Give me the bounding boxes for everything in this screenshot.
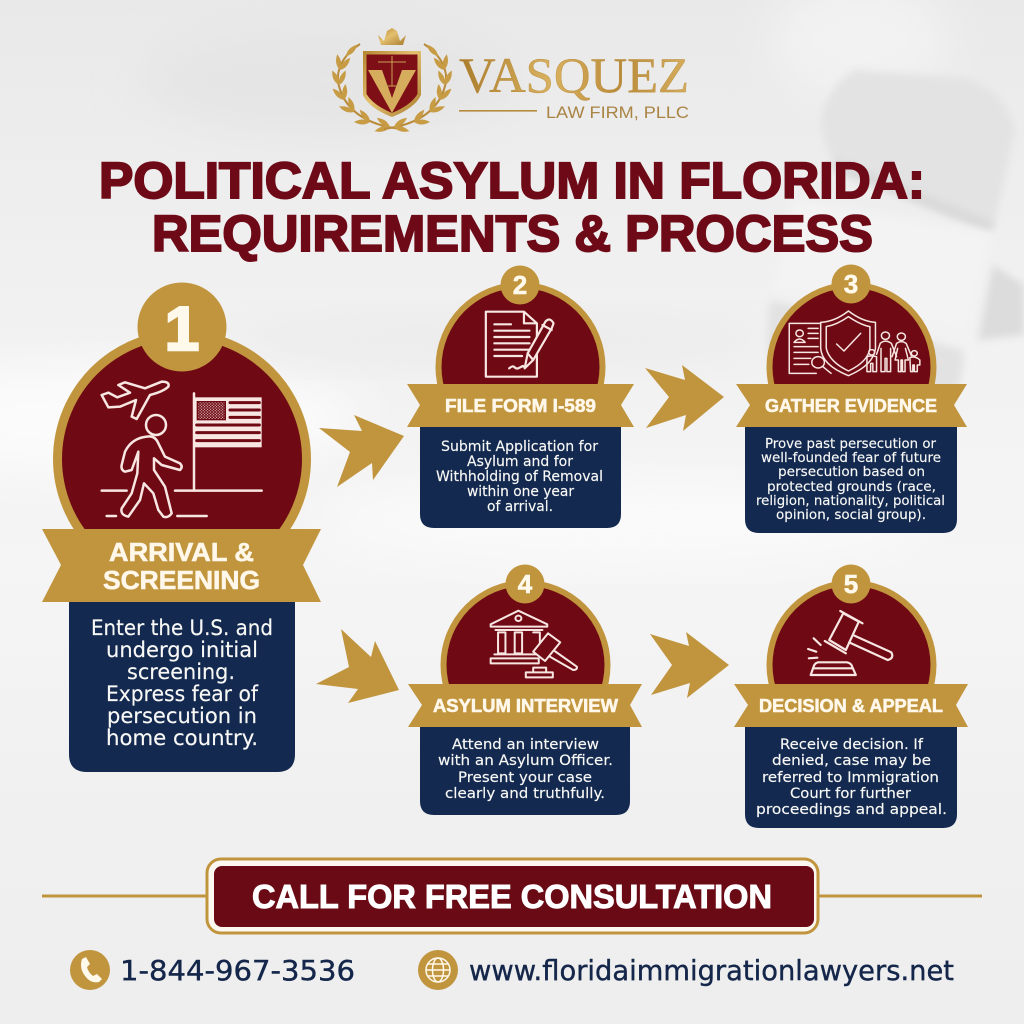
website contact: www.floridaimmigrationlawyers.net [469,954,954,987]
step 5 text box: Court for further [790,786,911,802]
step 3 text box: Prove past persecution or [765,436,936,452]
step 5 text box [745,725,957,828]
step 2 number badge [500,266,540,304]
step 3 ribbon: GATHER EVIDENCE [765,396,937,416]
step 4 ribbon [408,684,642,727]
arrow: step 4 to step 5 [650,632,729,698]
step 2 text box: of arrival. [487,499,553,515]
step 4 text box: with an Asylum Officer. [438,753,613,769]
step 3 ribbon [736,384,967,427]
step 1 ribbon [42,529,321,602]
icon: courthouse and gavel [491,611,577,677]
step 2 circle [436,282,606,452]
step 5 text box: referred to Immigration [762,770,939,786]
step 1 ribbon: SCREENING [103,565,260,595]
step 1 number badge: 1 [165,295,199,364]
arrow: step 1 to step 4 [316,629,399,703]
title: REQUIREMENTS & PROCESS [152,205,873,262]
icon: laurel left [330,43,400,134]
step 5 number badge: 5 [844,569,858,599]
step 5 ribbon [734,684,968,727]
step 4 circle [440,580,610,750]
step 1 ribbon: ARRIVAL & [109,537,254,567]
step 5 number badge [832,564,870,604]
step 2 text box [420,425,621,528]
title: POLITICAL ASYLUM IN FLORIDA: [99,152,925,209]
panel: step 3 gather evidence [736,264,967,533]
icon: document and pen [486,312,554,377]
step 4 text box: Present your case [458,770,592,786]
icon: phone [70,950,110,990]
icon: gavel [808,611,892,675]
step 2 number badge: 2 [513,270,527,300]
title [99,152,925,262]
icon: crown [378,28,406,45]
arrow: step 2 to step 3 [645,365,724,431]
step 5 ribbon: DECISION & APPEAL [759,696,943,716]
step 5 text box: denied, case may be [772,753,931,769]
panel: step 2 file form [407,266,634,528]
step 2 text box: Asylum and for [467,454,573,470]
step 4 text box: clearly and truthfully. [445,786,605,802]
step 3 text box: well-founded fear of future [761,450,941,466]
step 5 text box: Receive decision. If [780,737,924,753]
step 1 text box: home country. [106,726,258,750]
icon: plane, walking person and flag [102,382,262,517]
phone contact: 1-844-967-3536 [120,954,355,987]
step 5 text box: proceedings and appeal. [756,802,947,818]
icon: laurel right [384,43,454,134]
step 3 text box [745,425,957,533]
icon: document, shield and family [789,311,920,376]
logo: Vasquez Law Firm [330,28,689,134]
step 4 text box: Attend an interview [452,737,599,753]
icon: shield [363,51,421,117]
step 4 number badge: 4 [518,569,533,599]
step 3 number badge [832,264,870,304]
step 2 ribbon [407,384,634,427]
step 3 text box: opinion, social group). [776,507,926,523]
icon: globe [418,950,458,990]
step 1 circle [53,330,311,588]
call to action banner [42,859,982,933]
step 1 text box: screening. [127,660,235,684]
step 2 text box: Withholding of Removal [436,469,603,485]
step 3 circle [766,282,936,452]
panel: step 1 arrival and screening [42,282,321,772]
step 5 circle [766,580,936,750]
step 1 text box [69,600,295,772]
step 1 text box: persecution in [107,704,257,728]
step 1 number badge [138,282,226,372]
call to action banner: CALL FOR FREE CONSULTATION [252,878,772,915]
panel: step 5 decision and appeal [734,564,968,828]
step 4 ribbon: ASYLUM INTERVIEW [433,696,618,716]
step 2 text box: within one year [467,484,574,500]
step 2 text box: Submit Application for [441,439,598,455]
logo subtitle: LAW FIRM, PLLC [546,103,689,122]
step 4 text box [420,725,630,815]
panel: step 4 asylum interview [408,564,642,815]
phone contact [70,950,355,990]
step 1 text box: Enter the U.S. and [91,616,273,640]
step 3 text box: protected grounds (race, [767,479,936,495]
step 3 text box: persecution based on [778,464,925,480]
step 2 ribbon: FILE FORM I-589 [445,396,596,416]
logo wordmark: VASQUEZ [459,47,689,103]
arrow: step 1 to step 2 [319,415,404,487]
step 3 number badge: 3 [844,269,858,299]
step 4 number badge [506,564,544,604]
step 1 text box: Express fear of [106,682,259,706]
step 3 text box: religion, nationality, political [756,493,945,509]
step 1 text box: undergo initial [106,638,258,662]
